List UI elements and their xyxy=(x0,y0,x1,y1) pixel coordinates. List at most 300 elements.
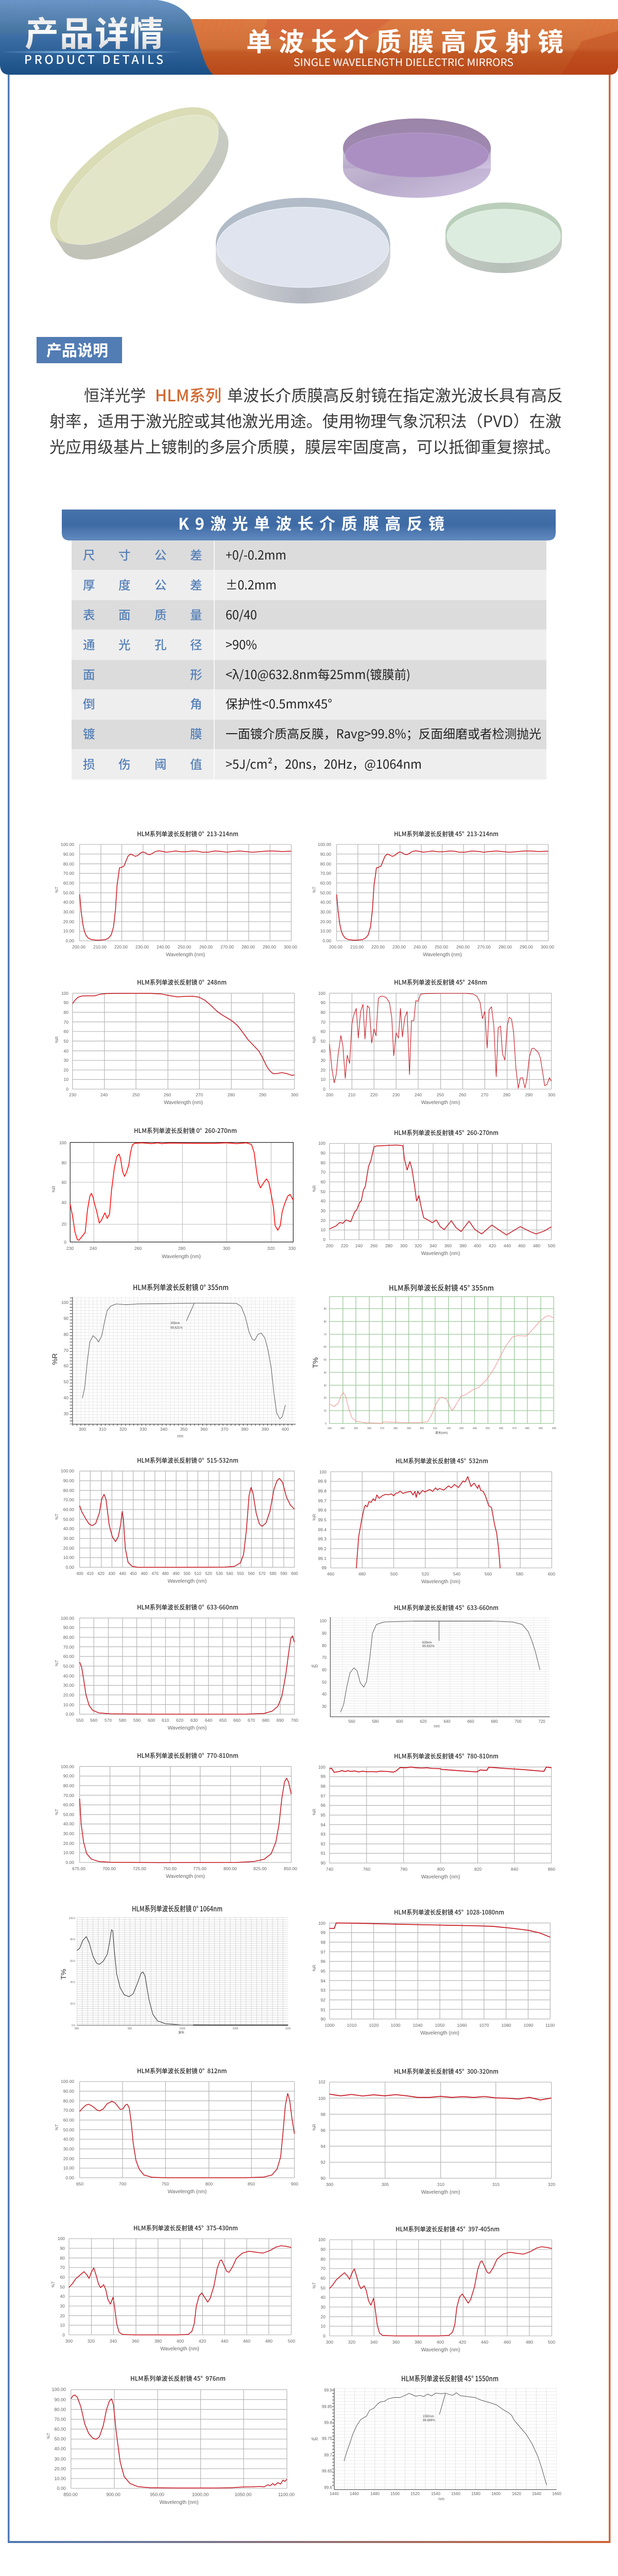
x axis ticks: 240 xyxy=(90,1246,97,1251)
x axis ticks: 410 xyxy=(87,1571,94,1576)
table rows background xyxy=(72,540,546,779)
y axis ticks: 20.00 xyxy=(63,919,74,924)
x axis ticks: 480 xyxy=(162,1571,169,1576)
y axis ticks: 10 xyxy=(323,1410,327,1413)
curve xyxy=(356,1477,500,1568)
lens: yellow xyxy=(29,83,249,284)
x axis ticks: 600 xyxy=(148,1718,155,1723)
table header: K9激光单波长介质膜高反镜 xyxy=(178,511,444,534)
y axis ticks: 93 xyxy=(321,1988,325,1993)
y axis ticks: 20.0 xyxy=(70,2003,75,2006)
x axis label: Wavelength (nm) xyxy=(160,2500,198,2505)
row: thickness tolerance xyxy=(83,575,277,593)
y axis ticks: 40 xyxy=(64,1395,68,1400)
y axis ticks: 20.00 xyxy=(63,2156,74,2161)
y axis ticks: 99.4 xyxy=(318,1527,327,1532)
x axis ticks: 820 xyxy=(474,1867,482,1872)
y axis ticks: 10.00 xyxy=(320,928,331,934)
y axis ticks: 20.00 xyxy=(54,2466,66,2471)
y axis ticks: 40.00 xyxy=(63,1673,74,1679)
y axis ticks: 20 xyxy=(64,1067,68,1073)
x axis ticks: 440 xyxy=(473,1427,477,1430)
x axis ticks: 260 xyxy=(134,1246,142,1251)
curve xyxy=(337,851,548,940)
y axis ticks: 99.8 xyxy=(318,1488,327,1494)
x axis ticks: 1520 xyxy=(410,2492,420,2496)
chart title: HLM系列单波长反射镜 0° 633-660nm xyxy=(137,1602,238,1612)
y axis ticks: 0.00 xyxy=(65,938,74,943)
y axis ticks: 100 xyxy=(61,991,68,996)
y axis ticks: 50 xyxy=(64,1379,68,1384)
y axis ticks: 60.0 xyxy=(70,1960,75,1963)
y axis label: %T xyxy=(51,2281,56,2287)
y axis ticks: 0.00 xyxy=(65,2175,74,2180)
y axis ticks: 80 xyxy=(64,1010,68,1015)
x axis ticks: 260.00 xyxy=(199,944,213,950)
x axis ticks: 480 xyxy=(533,1243,540,1248)
chart: 45° 1550nm xyxy=(312,2374,561,2501)
x axis ticks: 540 xyxy=(226,1571,233,1576)
row: chamfer: 倒角 xyxy=(83,694,202,712)
row: surface figure xyxy=(83,665,410,683)
y axis ticks: 90 xyxy=(321,2247,325,2252)
y axis ticks: 70 xyxy=(322,1655,327,1660)
chart: 45° 397-405nm xyxy=(312,2224,555,2353)
x axis ticks: 1080 xyxy=(502,2023,511,2028)
y axis ticks: 60.00 xyxy=(63,880,74,886)
y axis ticks: 99.6 xyxy=(318,1507,327,1513)
curve xyxy=(69,2246,291,2335)
y axis ticks: 99 xyxy=(321,1930,325,1935)
y axis ticks: 99.75 xyxy=(322,2436,333,2441)
y axis ticks: 95 xyxy=(321,1812,325,1818)
y axis ticks: 70 xyxy=(64,1020,68,1025)
x axis ticks: 200 xyxy=(326,1243,333,1248)
x axis ticks: 1060 xyxy=(457,2023,467,2028)
x axis ticks: 460 xyxy=(327,1571,334,1577)
x axis ticks: 280 xyxy=(228,1092,235,1097)
x axis ticks: 280 xyxy=(503,1092,510,1097)
y axis ticks: 100 xyxy=(318,1921,325,1926)
x axis ticks: 500 xyxy=(183,1571,191,1576)
x axis ticks: 360 xyxy=(392,2340,400,2345)
y axis ticks: 90 xyxy=(321,1150,325,1156)
x axis ticks: 240 xyxy=(355,1243,363,1248)
y axis ticks: 90.00 xyxy=(63,1625,74,1630)
curve xyxy=(330,1767,552,1772)
y axis label: %R xyxy=(312,2437,318,2442)
x axis ticks: 850 xyxy=(248,2181,255,2187)
y axis ticks: 20.00 xyxy=(63,1546,74,1551)
chart title: HLM系列单波长反射镜 45° 397-405nm xyxy=(396,2224,500,2233)
y axis ticks: 99.5 xyxy=(318,1517,327,1522)
main title: 单波长介质膜高反射镜 xyxy=(246,22,563,59)
chart title: HLM系列单波长反射镜 0° 355nm xyxy=(133,1282,229,1293)
x axis ticks: 380 xyxy=(241,1427,248,1432)
y axis ticks: 80 xyxy=(62,1160,66,1165)
x axis ticks: 460 xyxy=(499,1427,503,1430)
x axis ticks: 500 xyxy=(548,2340,555,2345)
y axis ticks: 0.00 xyxy=(65,1711,74,1717)
x axis ticks: 460 xyxy=(518,1243,525,1248)
x axis ticks: 725.00 xyxy=(133,1866,146,1871)
y axis ticks: 100.00 xyxy=(318,842,331,847)
x axis ticks: 840 xyxy=(511,1867,518,1872)
y axis ticks: 0 xyxy=(325,1422,327,1426)
chart: 45° 1028-1080nm xyxy=(312,1907,555,2036)
y axis ticks: 20 xyxy=(321,1218,325,1223)
y axis ticks: 50.00 xyxy=(63,1664,74,1669)
y axis ticks: 90.00 xyxy=(320,852,331,857)
x axis ticks: 400 xyxy=(76,1571,83,1576)
x axis ticks: 300 xyxy=(291,1092,298,1097)
row: clear aperture xyxy=(83,635,257,653)
x axis label: Wavelength (nm) xyxy=(160,2346,199,2352)
x axis ticks: 220 xyxy=(370,1092,377,1097)
y axis ticks: 40.00 xyxy=(63,900,74,905)
x axis ticks: 280 xyxy=(385,1243,392,1248)
y axis ticks: 91 xyxy=(321,2007,325,2012)
row: coating: 一面镀介质高反膜，Ravg>99.8%；反面细磨或者检测抛光 xyxy=(226,724,541,742)
y axis ticks: 94 xyxy=(321,2144,325,2149)
x axis ticks: 300 xyxy=(65,2338,73,2344)
callout xyxy=(170,1322,183,1330)
y axis ticks: 40 xyxy=(62,1200,66,1205)
y axis label: %T xyxy=(312,887,317,893)
chart title: HLM系列单波长反射镜 0° 812nm xyxy=(137,2066,227,2075)
chart: 0° 248nm xyxy=(55,977,298,1106)
y axis label: T% xyxy=(59,1969,67,1979)
x axis ticks: 400 xyxy=(177,2338,184,2344)
x axis ticks: 860 xyxy=(548,1867,555,1872)
curve xyxy=(80,1636,295,1714)
x axis ticks: 290 xyxy=(525,1092,533,1097)
y axis ticks: 20.00 xyxy=(63,1841,74,1846)
x axis ticks: 580 xyxy=(372,1719,379,1724)
y axis ticks: 99.7 xyxy=(324,2453,333,2458)
x axis ticks: 240 xyxy=(100,1092,108,1097)
x axis ticks: 750 xyxy=(162,2181,169,2187)
x axis ticks: 1070 xyxy=(479,2023,489,2028)
y axis ticks: 60 xyxy=(321,1029,325,1034)
row: damage threshold: >5J/cm²，20ns，20Hz，@1064nm xyxy=(226,754,422,772)
x axis ticks: 280.00 xyxy=(499,944,512,950)
chart: 0° 812nm xyxy=(55,2066,298,2195)
lens: green xyxy=(445,202,562,273)
x axis ticks: 360 xyxy=(132,2338,139,2344)
y axis ticks: 40 xyxy=(321,1198,325,1204)
y axis ticks: 40.00 xyxy=(320,900,331,905)
x axis ticks: 600 xyxy=(396,1719,403,1724)
row: clear aperture: 通光孔径 xyxy=(83,635,202,653)
x axis ticks: 1580 xyxy=(471,2492,480,2496)
y axis ticks: 50.00 xyxy=(63,1517,74,1522)
y axis ticks: 50.00 xyxy=(63,2127,74,2132)
description paragraph: 单波长介质膜高反射镜在指定激光波长具有高反 xyxy=(227,383,563,406)
x axis ticks: 420 xyxy=(447,1427,451,1430)
x axis ticks: 450 xyxy=(130,1571,137,1576)
y axis ticks: 70.00 xyxy=(320,871,331,876)
description paragraph: 光应用级基片上镀制的多层介质膜，膜层牢固度高，可以抵御重复擦拭。 xyxy=(49,434,560,457)
x axis ticks: 580 xyxy=(119,1718,126,1723)
x axis ticks: 640 xyxy=(443,1719,451,1724)
y axis ticks: 0.00 xyxy=(57,2486,66,2491)
y axis ticks: 98 xyxy=(321,1940,325,1945)
x axis label: Wavelength (nm) xyxy=(421,1874,460,1880)
y axis label: %T xyxy=(55,1514,59,1520)
x axis ticks: 390 xyxy=(262,1427,269,1432)
y axis label: %T xyxy=(46,2433,51,2439)
x axis ticks: 260.00 xyxy=(456,944,470,950)
x axis ticks: 520 xyxy=(422,1571,429,1577)
y axis label: %R xyxy=(52,1185,56,1192)
y axis label: %R xyxy=(55,1036,59,1043)
curve xyxy=(80,2093,295,2178)
x axis ticks: 320 xyxy=(267,1246,274,1251)
x axis ticks: 1050.00 xyxy=(235,2492,251,2497)
x axis ticks: 330 xyxy=(288,1246,296,1251)
y axis ticks: 99 xyxy=(321,1774,325,1779)
callout: 355nm xyxy=(170,1322,180,1325)
y axis ticks: 99.3 xyxy=(318,1536,327,1541)
y axis ticks: 40 xyxy=(64,1048,68,1054)
y axis ticks: 102 xyxy=(318,2079,325,2084)
frame: right border xyxy=(609,75,611,2543)
x axis ticks: 200 xyxy=(326,1092,333,1097)
chart: 0° 213-214nm xyxy=(55,829,297,958)
curve xyxy=(340,1621,540,1712)
x axis ticks: 210.00 xyxy=(93,944,107,950)
x axis ticks: 1460 xyxy=(350,2492,359,2496)
callout: 99.621% xyxy=(170,1327,183,1330)
x axis ticks: 440 xyxy=(504,1243,511,1248)
x axis ticks: 250.00 xyxy=(435,944,448,950)
x axis label: Wavelength (nm) xyxy=(421,1100,460,1106)
x axis ticks: 260 xyxy=(370,1243,377,1248)
y axis ticks: 10.00 xyxy=(63,1555,74,1560)
x axis ticks: 480 xyxy=(358,1571,366,1577)
x axis ticks: 720 xyxy=(538,1719,545,1724)
x axis ticks: 620 xyxy=(420,1719,427,1724)
chart title: HLM系列单波长反射镜 45° 976nm xyxy=(130,2374,226,2383)
y axis ticks: 0.00 xyxy=(65,1565,74,1570)
x axis ticks: 825.00 xyxy=(253,1866,267,1871)
y axis ticks: 0 xyxy=(66,1087,68,1092)
row: size tolerance: +0/-0.2mm xyxy=(226,545,286,563)
curve xyxy=(77,1929,288,2025)
y axis ticks: 30.00 xyxy=(320,909,331,914)
callout: 1550nm xyxy=(423,2415,434,2418)
x axis label: Wavelength (nm) xyxy=(421,2190,460,2195)
y axis ticks: 50.00 xyxy=(54,2436,66,2442)
x axis ticks: 330 xyxy=(328,1427,332,1430)
y axis ticks: 40.00 xyxy=(63,1526,74,1531)
y axis ticks: 50 xyxy=(64,1039,68,1044)
y axis ticks: 90 xyxy=(321,1860,325,1866)
x axis ticks: 350 xyxy=(180,1427,187,1432)
x axis ticks: 270 xyxy=(196,1092,203,1097)
x axis ticks: 700 xyxy=(291,1718,298,1723)
y axis ticks: 80.00 xyxy=(63,2098,74,2104)
x axis ticks: 390 xyxy=(407,1427,411,1430)
y axis ticks: 80.00 xyxy=(63,1635,74,1640)
x axis ticks: 640 xyxy=(205,1718,212,1723)
y axis ticks: 100.0 xyxy=(68,1917,75,1920)
y axis ticks: 20.00 xyxy=(320,919,331,924)
x axis ticks: 470 xyxy=(151,1571,159,1576)
y axis ticks: 50.00 xyxy=(63,890,74,895)
x axis ticks: 1100.00 xyxy=(278,2492,295,2497)
chart: 45° 375-430nm xyxy=(51,2223,295,2352)
x axis label: Wavelength (nm) xyxy=(421,2347,460,2353)
x axis ticks: 340 xyxy=(430,1243,437,1248)
x axis ticks: 1620 xyxy=(512,2492,521,2496)
x axis ticks: 230.00 xyxy=(135,944,149,950)
y axis ticks: 60 xyxy=(321,1179,325,1184)
x axis ticks: 700 xyxy=(119,2181,126,2187)
x axis ticks: 290 xyxy=(259,1092,266,1097)
y axis ticks: 90 xyxy=(323,1308,327,1311)
y axis ticks: 90 xyxy=(64,1000,68,1005)
x axis ticks: 270.00 xyxy=(220,944,234,950)
x axis label: Wavelength (nm) xyxy=(164,1100,203,1106)
y axis ticks: 80 xyxy=(64,1332,68,1337)
y axis ticks: 60.00 xyxy=(63,1507,74,1512)
y axis ticks: 70 xyxy=(321,1170,325,1175)
x axis ticks: 440 xyxy=(481,2340,488,2345)
y axis ticks: 20 xyxy=(321,2314,325,2319)
y axis ticks: 94 xyxy=(321,1978,325,1984)
frame: left border xyxy=(8,75,9,2543)
x axis label: Wavelength (nm) xyxy=(168,1725,207,1731)
curve xyxy=(73,993,295,1075)
y axis ticks: 100 xyxy=(319,1469,327,1475)
y axis ticks: 99 xyxy=(322,1565,327,1570)
y axis ticks: 100 xyxy=(318,2237,325,2242)
y axis ticks: 99.9 xyxy=(324,2388,333,2393)
y axis ticks: 92 xyxy=(321,2160,325,2165)
x axis ticks: 480 xyxy=(265,2338,272,2344)
x axis ticks: 620 xyxy=(176,1718,183,1723)
y axis ticks: 0 xyxy=(323,1237,325,1242)
y axis ticks: 80.00 xyxy=(63,1783,74,1788)
y axis ticks: 90 xyxy=(321,2016,325,2022)
y axis ticks: 80 xyxy=(321,2257,325,2262)
chart title: HLM系列单波长反射镜 0° 515-532nm xyxy=(137,1455,238,1465)
y axis ticks: 100.00 xyxy=(61,2079,74,2084)
row: coating xyxy=(83,724,541,742)
x axis ticks: 1500 xyxy=(390,2492,400,2496)
y axis ticks: 40.0 xyxy=(70,1981,75,1984)
x axis ticks: 680 xyxy=(262,1718,269,1723)
y axis ticks: 100 xyxy=(58,2236,65,2241)
chart title: HLM系列单波长反射镜 45° 1550nm xyxy=(401,2374,499,2384)
x axis label: 波长 xyxy=(178,2030,184,2035)
x axis ticks: 420 xyxy=(489,1243,496,1248)
x axis ticks: 560 xyxy=(348,1719,355,1724)
x axis ticks: 340 xyxy=(370,2340,377,2345)
x axis ticks: 590 xyxy=(280,1571,287,1576)
y axis ticks: 30.00 xyxy=(63,2146,74,2151)
x axis ticks: 900.00 xyxy=(106,2492,121,2497)
y axis ticks: 10.00 xyxy=(54,2476,66,2481)
x axis ticks: 500 xyxy=(548,1243,555,1248)
y axis ticks: 40.00 xyxy=(54,2446,66,2451)
y axis ticks: 50 xyxy=(322,1680,327,1685)
y axis ticks: 40 xyxy=(321,2295,325,2300)
x axis ticks: 300.00 xyxy=(541,944,554,950)
header: orange title band xyxy=(185,19,618,75)
y axis ticks: 80 xyxy=(321,1160,325,1165)
y axis ticks: 10 xyxy=(321,1077,325,1082)
y axis ticks: 98 xyxy=(321,1784,325,1789)
chart title: HLM系列单波长反射镜 0° 1064nm xyxy=(132,1904,222,1914)
x axis ticks: 400 xyxy=(282,1427,289,1432)
x axis ticks: 1050 xyxy=(435,2023,445,2028)
y axis ticks: 90.00 xyxy=(63,2089,74,2094)
y axis ticks: 10.00 xyxy=(63,1850,74,1855)
y axis ticks: 0.0 xyxy=(72,2024,75,2027)
y axis ticks: 30.00 xyxy=(63,1831,74,1836)
x axis ticks: 900 xyxy=(291,2181,298,2187)
y axis ticks: 99.7 xyxy=(318,1498,327,1503)
y axis ticks: 80 xyxy=(322,1643,327,1648)
row: surface quality: 表面质量 xyxy=(83,605,202,623)
x axis ticks: 1440 xyxy=(330,2492,339,2496)
x axis ticks: 320 xyxy=(415,1243,422,1248)
description paragraph: 恒洋光学 xyxy=(84,383,146,406)
y axis ticks: 20 xyxy=(321,1067,325,1073)
y axis label: %T xyxy=(55,1660,59,1666)
curve xyxy=(330,1145,552,1235)
y axis ticks: 0.00 xyxy=(322,938,331,943)
x axis label: 波长(nm) xyxy=(435,1431,448,1435)
x axis ticks: 600 xyxy=(291,1571,298,1576)
x axis ticks: 650 xyxy=(219,1718,227,1723)
y axis ticks: 98 xyxy=(321,2112,325,2117)
y axis ticks: 96 xyxy=(321,2128,325,2133)
y axis ticks: 60 xyxy=(64,1363,68,1368)
x axis ticks: 600 xyxy=(548,1571,555,1577)
chart title: HLM系列单波长反射镜 45° 300-320nm xyxy=(394,2066,499,2076)
y axis ticks: 99.6 xyxy=(324,2485,333,2490)
x axis ticks: 380 xyxy=(415,2340,422,2345)
product photo: coated lenses xyxy=(29,83,562,303)
x axis ticks: 315 xyxy=(492,2182,500,2187)
y axis ticks: 30.00 xyxy=(63,909,74,914)
chart title: HLM系列单波长反射镜 45° 213-214nm xyxy=(394,829,499,838)
x axis ticks: 1000.00 xyxy=(192,2492,209,2497)
x axis ticks: 630 xyxy=(191,1718,198,1723)
y axis ticks: 100.00 xyxy=(52,2387,66,2392)
x axis ticks: 580 xyxy=(269,1571,277,1576)
x axis ticks: 500 xyxy=(288,2338,295,2344)
x axis ticks: 340 xyxy=(110,2338,117,2344)
x axis ticks: 220.00 xyxy=(371,944,385,950)
y axis ticks: 50 xyxy=(60,2284,65,2290)
x axis ticks: 270.00 xyxy=(477,944,491,950)
x axis ticks: 340 xyxy=(340,1427,345,1430)
y axis ticks: 80.00 xyxy=(54,2407,66,2412)
chart title: HLM系列单波长反射镜 45° 780-810nm xyxy=(394,1751,499,1760)
y axis ticks: 90 xyxy=(322,1631,327,1636)
x axis ticks: 220.00 xyxy=(114,944,128,950)
x axis ticks: 400 xyxy=(437,2340,444,2345)
x axis ticks: 490 xyxy=(539,1427,543,1430)
x axis ticks: 300 xyxy=(223,1246,230,1251)
y axis ticks: 80.00 xyxy=(63,861,74,867)
y axis label: %R xyxy=(312,1185,317,1192)
